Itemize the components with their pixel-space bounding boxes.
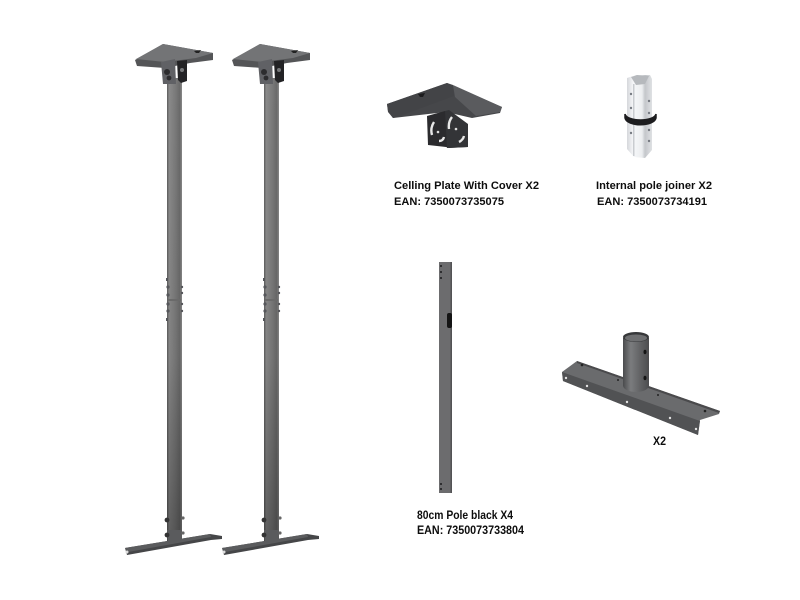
label: T-bracket quantity: X2 xyxy=(653,434,666,448)
holes xyxy=(440,265,442,490)
tube xyxy=(623,338,649,392)
label: 80cm pole: EAN: 7350073733804 xyxy=(417,525,525,537)
assembled pole left xyxy=(125,44,222,555)
ceiling plate product xyxy=(387,83,502,148)
label: ceiling plate: EAN: 7350073735075 xyxy=(394,196,504,208)
floor bracket xyxy=(125,516,222,555)
joint bolts xyxy=(263,278,280,321)
T-bracket xyxy=(562,332,720,435)
mounting bracket xyxy=(427,111,468,148)
pole shaft xyxy=(167,78,182,542)
assembled pole right xyxy=(222,44,319,555)
slot xyxy=(447,313,452,328)
label: pole joiner xyxy=(596,180,712,208)
pole shaft xyxy=(264,78,279,542)
joint bolts xyxy=(166,278,183,321)
label: ceiling plate: Celling Plate With Cover X2 xyxy=(394,180,539,192)
label: pole joiner: Internal pole joiner X2 xyxy=(596,180,712,192)
flange xyxy=(562,361,720,435)
label: 80cm pole xyxy=(417,510,525,537)
label: 80cm pole: 80cm Pole black X4 xyxy=(417,510,514,522)
rubber band xyxy=(625,114,656,125)
label: pole joiner: EAN: 7350073734191 xyxy=(597,196,707,208)
label: ceiling plate xyxy=(394,180,539,208)
ceiling plate xyxy=(135,44,213,84)
80cm pole xyxy=(439,262,452,493)
internal pole joiner xyxy=(625,75,656,158)
plate body xyxy=(387,83,502,118)
ceiling plate xyxy=(232,44,310,84)
joiner body xyxy=(627,75,652,158)
floor bracket xyxy=(222,516,319,555)
